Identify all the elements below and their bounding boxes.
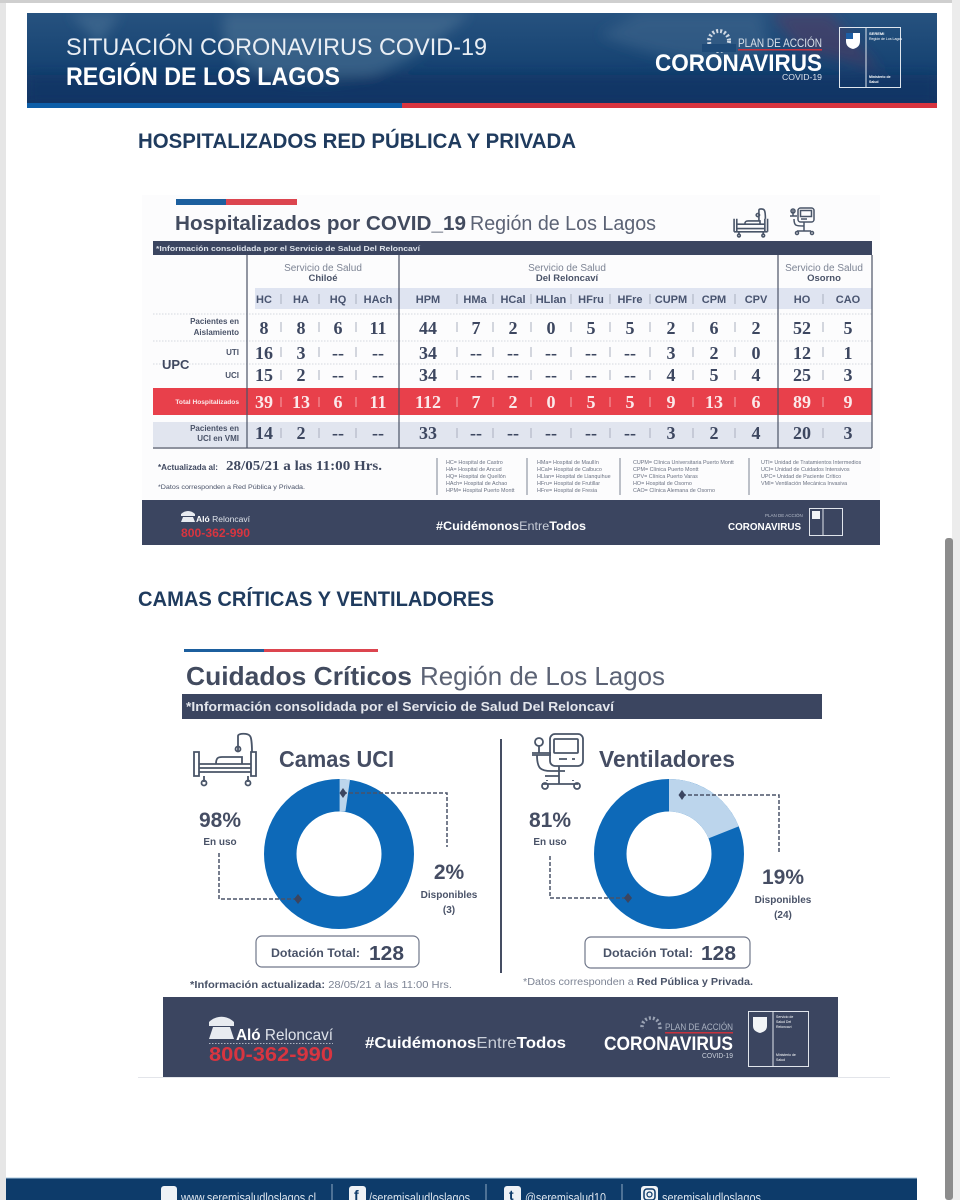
footer band large xyxy=(163,997,838,1077)
hospital code row: HPM xyxy=(416,294,440,306)
abbreviations legend: VMI= Ventilación Mecánica Invasiva xyxy=(761,481,847,487)
callout: disponibles: (24) xyxy=(774,910,792,921)
row: UPC UTI: 12 xyxy=(793,343,811,363)
header logo: seremi de salud: SEREMI xyxy=(869,31,884,36)
update note: *Actualizada al: xyxy=(158,462,218,472)
row: UPC UCI: -- xyxy=(372,365,384,385)
row: pacientes en aislamiento xyxy=(260,318,852,338)
abbreviations legend: UTI= Unidad de Tratamientos Intermedios xyxy=(761,460,862,466)
hospital code row: HCal xyxy=(500,294,526,306)
link: twitter xyxy=(504,1186,606,1200)
row: UPC UCI: -- xyxy=(585,365,597,385)
row: UPC UCI: -- xyxy=(470,365,482,385)
abbreviations legend: CUPM= Clínica Universitaria Puerto Montt xyxy=(633,460,734,466)
ministry logo xyxy=(748,1011,808,1066)
table title: Región de Los Lagos xyxy=(470,213,656,235)
row: UPC UTI: 2 xyxy=(710,343,718,363)
hospital code row: HQ xyxy=(330,294,347,306)
hospital code row: HMa xyxy=(463,294,487,306)
abbreviations legend: HFre= Hospital de Fresia xyxy=(537,488,597,494)
row: pacientes en aislamiento: 2 xyxy=(666,318,676,338)
critical care title: Región de Los Lagos xyxy=(420,661,665,691)
header logo: plan de acción coronavirus: COVID-19 xyxy=(782,72,822,82)
row: UPC UTI: 0 xyxy=(752,343,760,363)
row: UPC UTI: 3 xyxy=(666,343,676,363)
callout: disponibles: Disponibles xyxy=(421,890,478,901)
camas uci heading: Camas UCI xyxy=(279,746,394,772)
callout: en uso: 81% xyxy=(529,809,571,832)
row: total hospitalizados: 112 xyxy=(415,392,441,412)
row labels: UCI xyxy=(225,371,239,380)
row: pacientes en UCI en VMI: -- xyxy=(470,423,482,443)
hospital code row: HLlan xyxy=(536,294,567,306)
row: UPC UTI xyxy=(255,343,852,363)
row labels: Total Hospitalizados xyxy=(175,399,239,406)
link: website xyxy=(161,1186,316,1200)
hashtag: #Cuidémonos EntreTodos xyxy=(365,1035,566,1052)
page footer with social links xyxy=(6,1178,917,1200)
row: pacientes en UCI en VMI: 3 xyxy=(666,423,676,443)
coronavirus logo xyxy=(604,1018,733,1060)
row: UPC UCI: 4 xyxy=(666,365,676,385)
footer band small: CORONAVIRUS xyxy=(728,522,801,533)
row: UPC UTI: -- xyxy=(585,343,597,363)
row: UPC UCI: -- xyxy=(507,365,519,385)
row: pacientes en UCI en VMI: -- xyxy=(332,423,344,443)
hospital code row: HO xyxy=(794,294,811,306)
row: total hospitalizados: 5 xyxy=(586,392,596,412)
header title: SITUACIÓN CORONAVIRUS COVID-19 xyxy=(66,34,487,61)
callout: disponibles: Disponibles xyxy=(755,895,812,906)
section: ventiladores xyxy=(523,734,812,988)
dotación total box: Dotación Total: xyxy=(603,946,693,960)
vmi row band xyxy=(153,422,872,447)
row: pacientes en UCI en VMI: 3 xyxy=(844,423,852,443)
abbreviations legend: HMa= Hospital de Maullín xyxy=(537,460,599,466)
abbreviations legend: HAch= Hospital de Achao xyxy=(446,481,507,487)
row: total hospitalizados: 7 xyxy=(472,392,480,412)
info bar xyxy=(182,694,822,719)
heading: hospitalizados: HOSPITALIZADOS RED PÚBLICA Y PRIVADA xyxy=(138,129,576,153)
service group headers: Servicio de Salud xyxy=(528,263,606,274)
row: UPC UTI: 16 xyxy=(255,343,273,363)
row: pacientes en UCI en VMI: 33 xyxy=(419,423,437,443)
alo reloncaví hotline: 800-362-990 xyxy=(209,1044,333,1066)
row: pacientes en aislamiento: 52 xyxy=(793,318,811,338)
row: pacientes en aislamiento: 8 xyxy=(296,318,306,338)
icon: hospital bed xyxy=(194,734,256,786)
donut chart: ventiladores xyxy=(610,779,739,913)
hospital code row: CPV xyxy=(745,294,768,306)
row: pacientes en aislamiento: 6 xyxy=(710,318,718,338)
hospital code row: HC xyxy=(256,294,272,306)
row: pacientes en UCI en VMI xyxy=(255,423,852,443)
row: UPC UTI: -- xyxy=(624,343,636,363)
callout: en uso: En uso xyxy=(203,837,237,848)
row: UPC UTI: 3 xyxy=(296,343,306,363)
row labels: Aislamiento xyxy=(194,328,239,337)
coronavirus logo: PLAN DE ACCIÓN xyxy=(665,1022,733,1033)
row: total hospitalizados: 89 xyxy=(793,392,811,412)
row: UPC UCI: 34 xyxy=(419,365,437,385)
icon: hospital bed small xyxy=(734,209,768,237)
ministry logo: Ministerio de xyxy=(776,1053,796,1057)
abbreviations legend: HFru= Hospital de Frutillar xyxy=(537,481,600,487)
callout: disponibles: 2% xyxy=(434,861,464,884)
abbreviations legend: HLlan= Hospital de Llanquihue xyxy=(537,474,611,480)
callout: disponibles: (3) xyxy=(443,905,455,916)
callout: en uso: 98% xyxy=(199,809,241,832)
row: pacientes en aislamiento: 5 xyxy=(844,318,852,338)
code header band xyxy=(255,288,872,309)
row: pacientes en aislamiento: 6 xyxy=(334,318,342,338)
row: pacientes en UCI en VMI: -- xyxy=(585,423,597,443)
row: UPC UCI: 15 xyxy=(255,365,273,385)
dotación total box: Dotación Total: xyxy=(271,946,360,960)
footer band small xyxy=(142,500,880,545)
row: total hospitalizados: 13 xyxy=(292,392,310,412)
row: pacientes en aislamiento: 8 xyxy=(260,318,268,338)
panel accent stripe xyxy=(176,199,297,205)
abbreviations legend: UCI= Unidad de Cuidados Intensivos xyxy=(761,467,850,473)
row labels xyxy=(162,317,239,443)
row: total hospitalizados: 6 xyxy=(752,392,760,412)
callout: disponibles xyxy=(340,788,478,916)
header logo: seremi de salud: Salud xyxy=(869,80,879,84)
footer band small: #Cuidémonos EntreTodos xyxy=(436,519,586,533)
row: UPC UTI: 34 xyxy=(419,343,437,363)
hospital code row: CUPM xyxy=(655,294,687,306)
info bar: *Información consolidada por el Servicio de Salud Del Reloncaví xyxy=(156,244,421,253)
update note: *Información actualizada: 28/05/21 a las 11:00 Hrs. xyxy=(190,980,452,991)
service group headers: Servicio de Salud xyxy=(785,263,863,274)
icon: telephone small xyxy=(181,511,195,522)
row: pacientes en UCI en VMI: 14 xyxy=(255,423,273,443)
row: pacientes en aislamiento: 7 xyxy=(472,318,480,338)
abbreviations legend: HA= Hospital de Ancud xyxy=(446,467,502,473)
scrollbar xyxy=(945,538,953,1200)
row: total hospitalizados: 9 xyxy=(844,392,852,412)
row: total hospitalizados: 5 xyxy=(626,392,634,412)
dotación total box xyxy=(256,936,419,967)
link: instagram xyxy=(641,1186,761,1200)
callout: disponibles: 19% xyxy=(762,866,804,889)
row: pacientes en UCI en VMI: 4 xyxy=(752,423,760,443)
row: total hospitalizados: 2 xyxy=(508,392,518,412)
dotación total box xyxy=(585,937,750,968)
service group headers: Del Reloncaví xyxy=(536,273,599,284)
hospital code row: HFre xyxy=(617,294,643,306)
footer band small: 800-362-990 xyxy=(181,528,250,540)
footer band small: Aló Reloncaví xyxy=(196,515,251,524)
row labels: UTI xyxy=(226,348,239,357)
row: UPC UCI: -- xyxy=(332,365,344,385)
header logo: plan de acción coronavirus xyxy=(655,31,822,82)
row: pacientes en aislamiento: 11 xyxy=(369,318,387,338)
abbreviations legend: CPV= Clínica Puerto Varas xyxy=(633,474,698,480)
header logo: seremi de salud: Región de Los Lagos xyxy=(869,37,902,41)
row: UPC UTI: -- xyxy=(470,343,482,363)
icon: telephone xyxy=(209,1017,234,1039)
hospital code row: CAO xyxy=(836,294,861,306)
abbreviations legend: UPC= Unidad de Paciente Crítico xyxy=(761,474,841,480)
abbreviations legend: HO= Hospital de Osorno xyxy=(633,481,692,487)
abbreviations legend: CPM= Clínica Puerto Montt xyxy=(633,467,699,473)
abbreviations legend: HCal= Hospital de Calbuco xyxy=(537,467,602,473)
row: UPC UCI: -- xyxy=(545,365,557,385)
row: total hospitalizados: 39 xyxy=(255,392,273,412)
footer band small: PLAN DE ACCIÓN xyxy=(765,512,803,518)
header banner xyxy=(27,13,937,108)
callout: disponibles xyxy=(678,790,812,921)
row: UPC UCI: 2 xyxy=(296,365,306,385)
row: pacientes en UCI en VMI: 2 xyxy=(296,423,306,443)
info bar: *Información consolidada por el Servicio de Salud Del Reloncaví xyxy=(186,699,614,714)
hospital code row: HAch xyxy=(364,294,393,306)
row: pacientes en aislamiento: 2 xyxy=(752,318,760,338)
ministry logo: Salud xyxy=(776,1058,785,1062)
dotación total box: 128 xyxy=(701,943,736,965)
header accent stripe xyxy=(27,103,937,108)
row: UPC UCI xyxy=(255,365,852,385)
row: pacientes en UCI en VMI: -- xyxy=(507,423,519,443)
link: facebook xyxy=(349,1186,470,1200)
icon: ventilator xyxy=(532,734,583,789)
section: camas uci xyxy=(190,734,478,991)
row: pacientes en aislamiento: 2 xyxy=(508,318,518,338)
center divider xyxy=(500,739,502,973)
ministry logo: Servicio de xyxy=(776,1015,793,1019)
row: pacientes en UCI en VMI: -- xyxy=(545,423,557,443)
hospital code row: HA xyxy=(293,294,309,306)
row: UPC UCI: 4 xyxy=(752,365,760,385)
row: total hospitalizados xyxy=(255,392,852,412)
update note xyxy=(158,459,382,491)
row: pacientes en UCI en VMI: -- xyxy=(624,423,636,443)
critical care title: Cuidados Críticos xyxy=(186,661,412,691)
panel: hospitalizados table xyxy=(142,195,880,545)
header logo: seremi de salud xyxy=(840,27,902,88)
row: pacientes en aislamiento: 0 xyxy=(546,318,556,338)
row: total hospitalizados: 6 xyxy=(334,392,342,412)
icon: ventilator small xyxy=(790,208,814,234)
row: UPC UTI: 1 xyxy=(844,343,852,363)
data note: *Datos corresponden a Red Pública y Privada. xyxy=(523,977,753,988)
row: UPC UCI: 25 xyxy=(793,365,811,385)
row labels: UPC xyxy=(162,357,190,372)
ventiladores heading: Ventiladores xyxy=(599,746,735,772)
abbreviations legend xyxy=(437,458,862,495)
abbreviations legend: HC= Hospital de Castro xyxy=(446,460,503,466)
row: UPC UTI: -- xyxy=(545,343,557,363)
row: UPC UTI: -- xyxy=(332,343,344,363)
row: pacientes en UCI en VMI: -- xyxy=(372,423,384,443)
row: UPC UTI: -- xyxy=(507,343,519,363)
hospital code row: CPM xyxy=(702,294,726,306)
panel: cuidados críticos xyxy=(6,649,917,1200)
row: total hospitalizados: 11 xyxy=(369,392,387,412)
header logo: seremi de salud: Ministerio de xyxy=(869,75,891,79)
ministry logo: Salud Del xyxy=(776,1020,791,1024)
dotación total box: 128 xyxy=(369,943,404,965)
hospital code row xyxy=(256,294,861,306)
row: UPC UCI: 3 xyxy=(844,365,852,385)
callout: en uso xyxy=(199,809,302,904)
row: UPC UTI: -- xyxy=(372,343,384,363)
update note: *Datos corresponden a Red Pública y Privada. xyxy=(158,484,305,491)
row: total hospitalizados: 13 xyxy=(705,392,723,412)
table title xyxy=(175,213,656,235)
row: total hospitalizados: 9 xyxy=(666,392,676,412)
service group headers xyxy=(284,263,863,284)
alo reloncaví hotline: Aló Reloncaví xyxy=(236,1027,334,1044)
header logo: plan de acción coronavirus: CORONAVIRUS xyxy=(655,50,822,77)
heading: camas críticas: CAMAS CRÍTICAS Y VENTILADORES xyxy=(138,588,494,611)
callout: en uso xyxy=(529,809,632,903)
hospital code row: HFru xyxy=(578,294,604,306)
coronavirus logo: CORONAVIRUS xyxy=(604,1034,733,1055)
service group headers: Osorno xyxy=(807,273,841,284)
row: pacientes en UCI en VMI: 20 xyxy=(793,423,811,443)
service group headers: Servicio de Salud xyxy=(284,263,362,274)
header logo: plan de acción coronavirus: PLAN DE ACCIÓN xyxy=(738,37,822,50)
abbreviations legend: HPM= Hospital Puerto Montt xyxy=(446,488,515,494)
row: pacientes en aislamiento: 5 xyxy=(586,318,596,338)
header title xyxy=(66,34,487,91)
alo reloncaví hotline xyxy=(209,1027,334,1066)
ministry logo: Reloncaví xyxy=(776,1025,792,1029)
header title: REGIÓN DE LOS LAGOS xyxy=(66,61,340,91)
info bar xyxy=(153,241,872,255)
service group headers: Chiloé xyxy=(308,273,338,284)
critical care title xyxy=(186,661,665,691)
row labels: Pacientes en xyxy=(190,317,239,326)
row: total hospitalizados: 0 xyxy=(546,392,556,412)
donut chart: camas uci xyxy=(280,779,398,913)
total row band xyxy=(153,388,872,415)
row: pacientes en UCI en VMI: 2 xyxy=(710,423,718,443)
coronavirus logo: COVID-19 xyxy=(702,1053,733,1060)
row: UPC UCI: -- xyxy=(624,365,636,385)
row: pacientes en aislamiento: 44 xyxy=(419,318,437,338)
row labels: Pacientes en xyxy=(190,424,239,433)
critical care accent stripe xyxy=(184,649,378,652)
update note: 28/05/21 a las 11:00 Hrs. xyxy=(226,459,382,474)
row: UPC UCI: 5 xyxy=(710,365,718,385)
abbreviations legend: HQ= Hospital de Quellón xyxy=(446,474,506,480)
table title: Hospitalizados por COVID_19 xyxy=(175,213,466,235)
row: pacientes en aislamiento: 5 xyxy=(626,318,634,338)
callout: en uso: En uso xyxy=(533,837,567,848)
abbreviations legend: CAO= Clínica Alemana de Osorno xyxy=(633,488,715,494)
row labels: UCI en VMI xyxy=(197,434,239,443)
